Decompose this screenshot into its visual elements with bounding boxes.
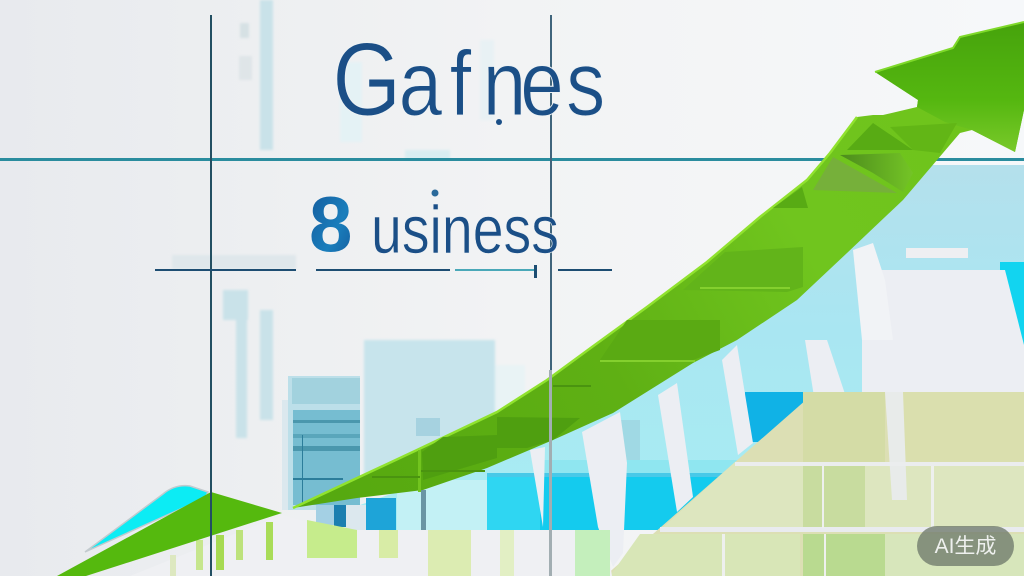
- heading numeral: 8: [309, 180, 352, 268]
- arrow highlight edge: [293, 117, 857, 508]
- heading word one: n: [483, 33, 526, 135]
- arrow body: [293, 22, 1024, 508]
- arrow head: [875, 22, 1024, 152]
- heading word two: usiness: [371, 192, 559, 268]
- vertical axis left: [210, 15, 212, 576]
- pale green lower-right panel: [605, 392, 1024, 576]
- AI badge: [917, 526, 1014, 566]
- horizontal teal axis: [0, 158, 1024, 161]
- lower band with green stripes: [130, 515, 612, 576]
- lower blue blocks: [316, 262, 1024, 531]
- sky panel beneath the arrow: [360, 165, 1024, 530]
- heading stray dot: [496, 119, 502, 125]
- heading droplet above i: [432, 190, 438, 196]
- heading word one: e: [520, 33, 564, 135]
- heading word one: f: [450, 33, 472, 135]
- white paper strips: [530, 243, 1024, 567]
- blue building: [282, 376, 440, 510]
- vertical axis right: [549, 15, 552, 576]
- AI badge: AI生成: [935, 535, 996, 558]
- heading word one: s: [566, 33, 605, 135]
- small green peak: [57, 492, 282, 576]
- heading word one: G: [332, 22, 401, 138]
- growth arrow: [293, 22, 1024, 508]
- heading underline: [155, 265, 612, 278]
- small cyan peak behind the green triangle: [85, 486, 208, 552]
- arrow facets: [372, 123, 957, 492]
- faint background building strips: [172, 0, 525, 475]
- heading word one: a: [399, 33, 443, 135]
